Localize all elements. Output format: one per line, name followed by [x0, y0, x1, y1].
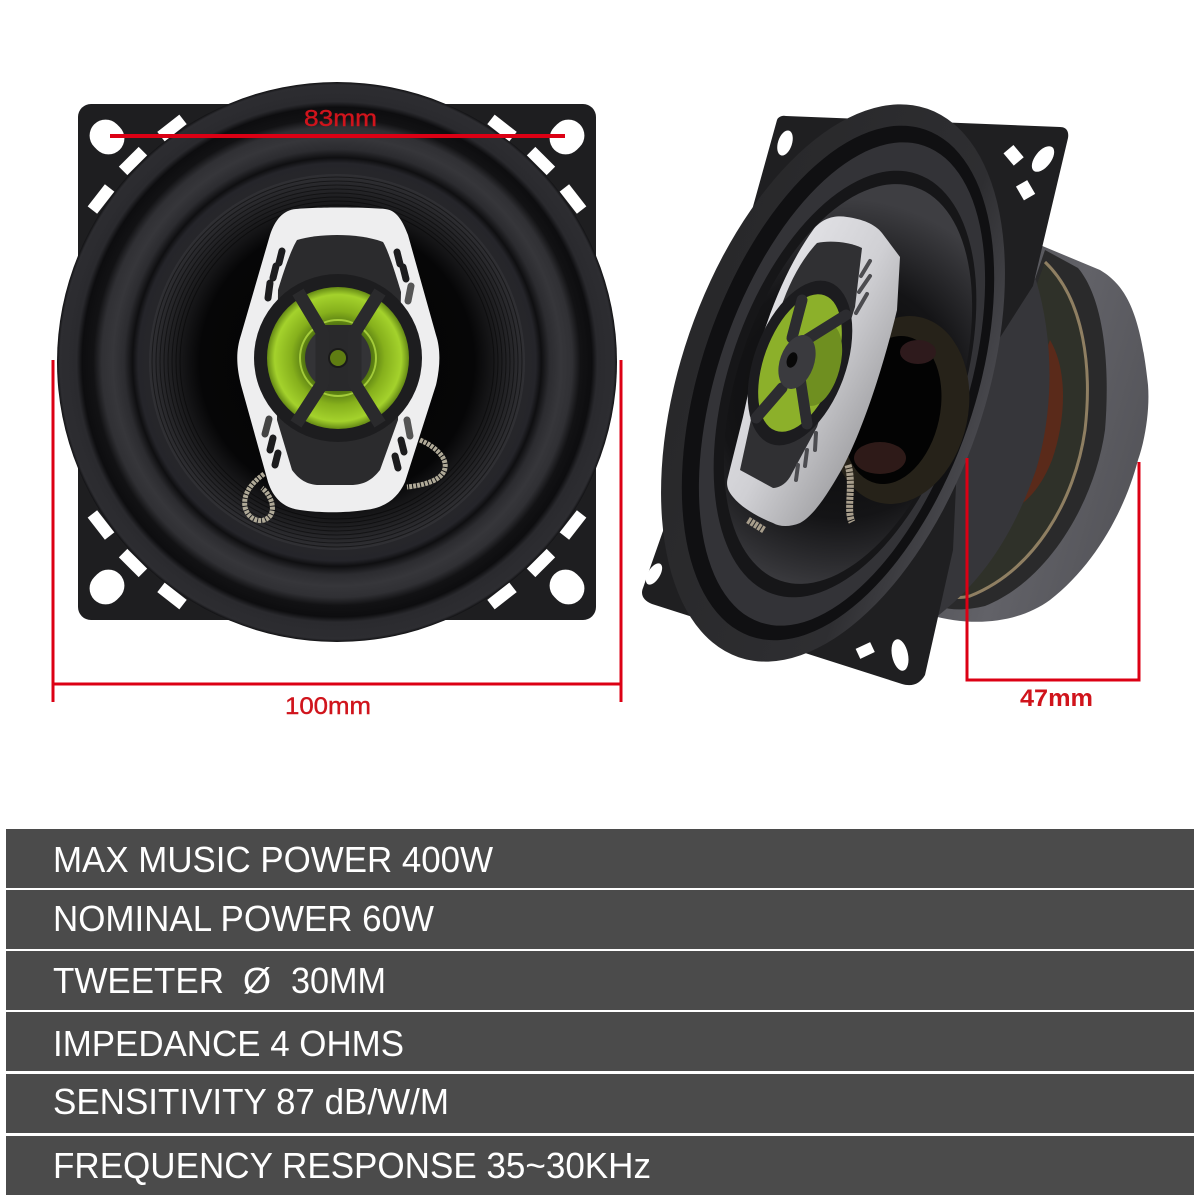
side view cone: [676, 152, 1020, 616]
side wire: [848, 465, 852, 522]
tweeter grille: [254, 274, 422, 442]
front rim: [595, 59, 1071, 707]
spec row: frequency response: FREQUENCY RESPONSE 35~30KHz: [53, 1145, 651, 1186]
spec row: sensitivity: SENSITIVITY 87 dB/W/M: [53, 1081, 449, 1122]
rim groove: [621, 85, 1055, 681]
spec row: tweeter: [6, 951, 1194, 1010]
surround inner shadow: [663, 136, 1027, 632]
front view speaker: [57, 82, 617, 642]
side slots: [796, 261, 870, 480]
vent slots: [265, 251, 411, 468]
basket: [860, 230, 1050, 630]
spec row: tweeter: 30MM: [291, 960, 386, 1001]
dimension: 100mm: [53, 360, 621, 720]
dark inner panel: [277, 235, 401, 485]
wire loops: [245, 440, 445, 521]
spec table: [6, 829, 1194, 1195]
side grille: [727, 266, 873, 460]
dimension: 100mm: 100mm: [285, 693, 371, 720]
cone with grooves: [149, 174, 525, 550]
rubber surround: [57, 82, 617, 642]
silver tweeter panel: [237, 208, 439, 512]
dimension: 83mm: 83mm: [304, 105, 377, 131]
spec row: tweeter: TWEETER: [53, 960, 224, 1001]
spec row: frequency response: [6, 1136, 1194, 1195]
spec row: tweeter: Ø: [243, 960, 271, 1001]
spec row: impedance: [6, 1012, 1194, 1071]
dimension: 47mm: 47mm: [1020, 685, 1093, 712]
surround: [643, 105, 1041, 663]
spec row: sensitivity: [6, 1074, 1194, 1133]
wire end: [748, 520, 764, 530]
cone opening: [814, 303, 986, 517]
spec row: max music power: MAX MUSIC POWER 400W: [53, 839, 493, 880]
mounting flange: [78, 104, 596, 620]
spec row: max music power: [6, 829, 1194, 888]
flange holes: [643, 128, 1059, 672]
spec row: nominal power: [6, 890, 1194, 949]
spec row: nominal power: NOMINAL POWER 60W: [53, 898, 434, 939]
flange holes and slits: [83, 113, 591, 611]
rear flange: [642, 116, 1068, 685]
dark panel: [740, 242, 862, 488]
dimension: 47mm: [967, 458, 1139, 712]
magnet: [925, 245, 1148, 622]
spec row: impedance: IMPEDANCE 4 OHMS: [53, 1023, 404, 1064]
silver panel: [727, 216, 900, 526]
voice coil: [1000, 340, 1063, 516]
side view speaker: [595, 59, 1148, 707]
